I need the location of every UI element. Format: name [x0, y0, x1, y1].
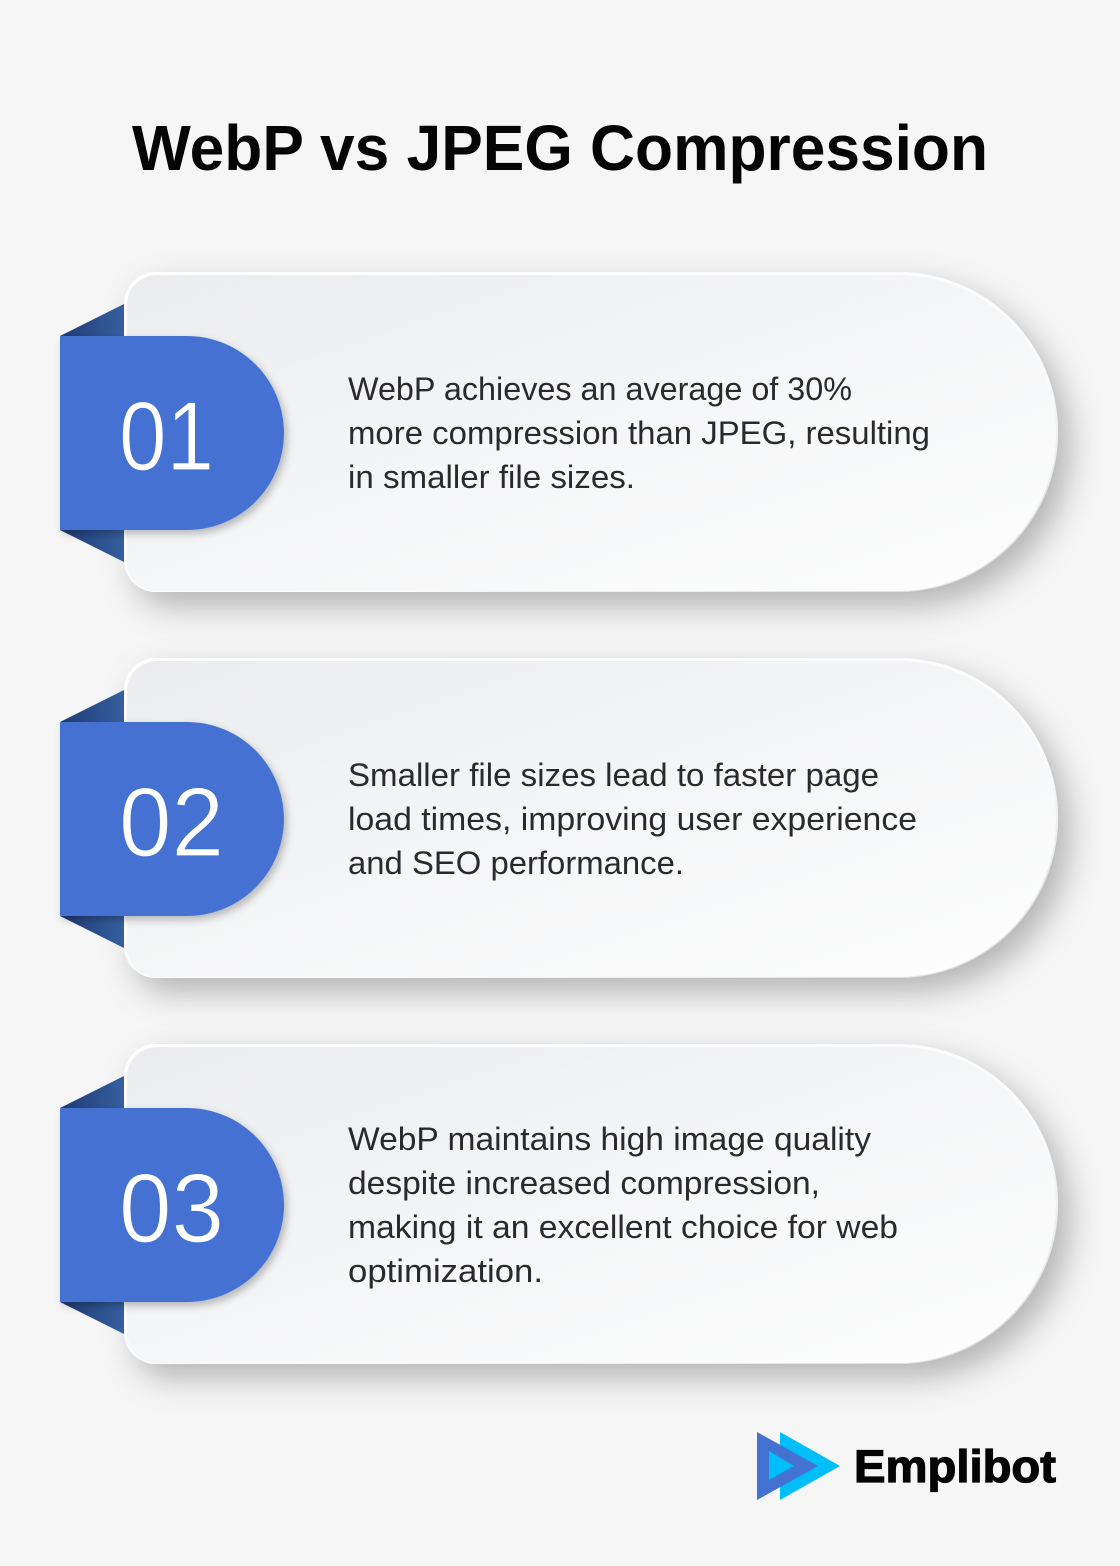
ribbon fold: step 01 — [60, 304, 124, 562]
badge: step 03 — [60, 1108, 284, 1302]
text: step 02: Smaller file sizes lead to faster page — [348, 757, 879, 793]
text: step 02: and SEO performance. — [348, 845, 684, 881]
text: step 01: WebP achieves an average of 30% — [348, 371, 852, 407]
panel: step 01 — [60, 272, 1058, 592]
panel: step 03 — [60, 1044, 1058, 1364]
text: step 03: optimization. — [348, 1253, 543, 1289]
text: step 03: despite increased compression, — [348, 1165, 820, 1201]
text: step 02: load times, improving user experience — [348, 801, 917, 837]
badge: step 02 — [60, 722, 284, 916]
text: step 02 — [348, 757, 917, 881]
text: step 01 — [348, 371, 930, 495]
badge: step 01 — [60, 336, 284, 530]
number: 01: 01 — [119, 381, 214, 491]
text: step 03 — [348, 1121, 898, 1289]
card: step 01 — [124, 272, 1058, 592]
card: step 02 — [124, 658, 1058, 978]
text: step 03: making it an excellent choice for web — [348, 1209, 898, 1245]
ribbon fold: step 02 — [60, 690, 124, 948]
text: step 01: more compression than JPEG, resulting — [348, 415, 930, 451]
wordmark: Emplibot — [854, 1441, 1056, 1492]
panel: step 02 — [60, 658, 1058, 978]
text: step 03: WebP maintains high image quality — [348, 1121, 872, 1157]
text: step 01: in smaller file sizes. — [348, 459, 635, 495]
title: WebP vs JPEG Compression — [132, 112, 988, 184]
number: 03: 03 — [119, 1153, 224, 1263]
ribbon fold: step 03 — [60, 1076, 124, 1334]
card: step 03 — [124, 1044, 1058, 1364]
icon: play triangles — [757, 1432, 840, 1500]
number: 02: 02 — [119, 767, 224, 877]
logo: Emplibot — [757, 1432, 1056, 1500]
